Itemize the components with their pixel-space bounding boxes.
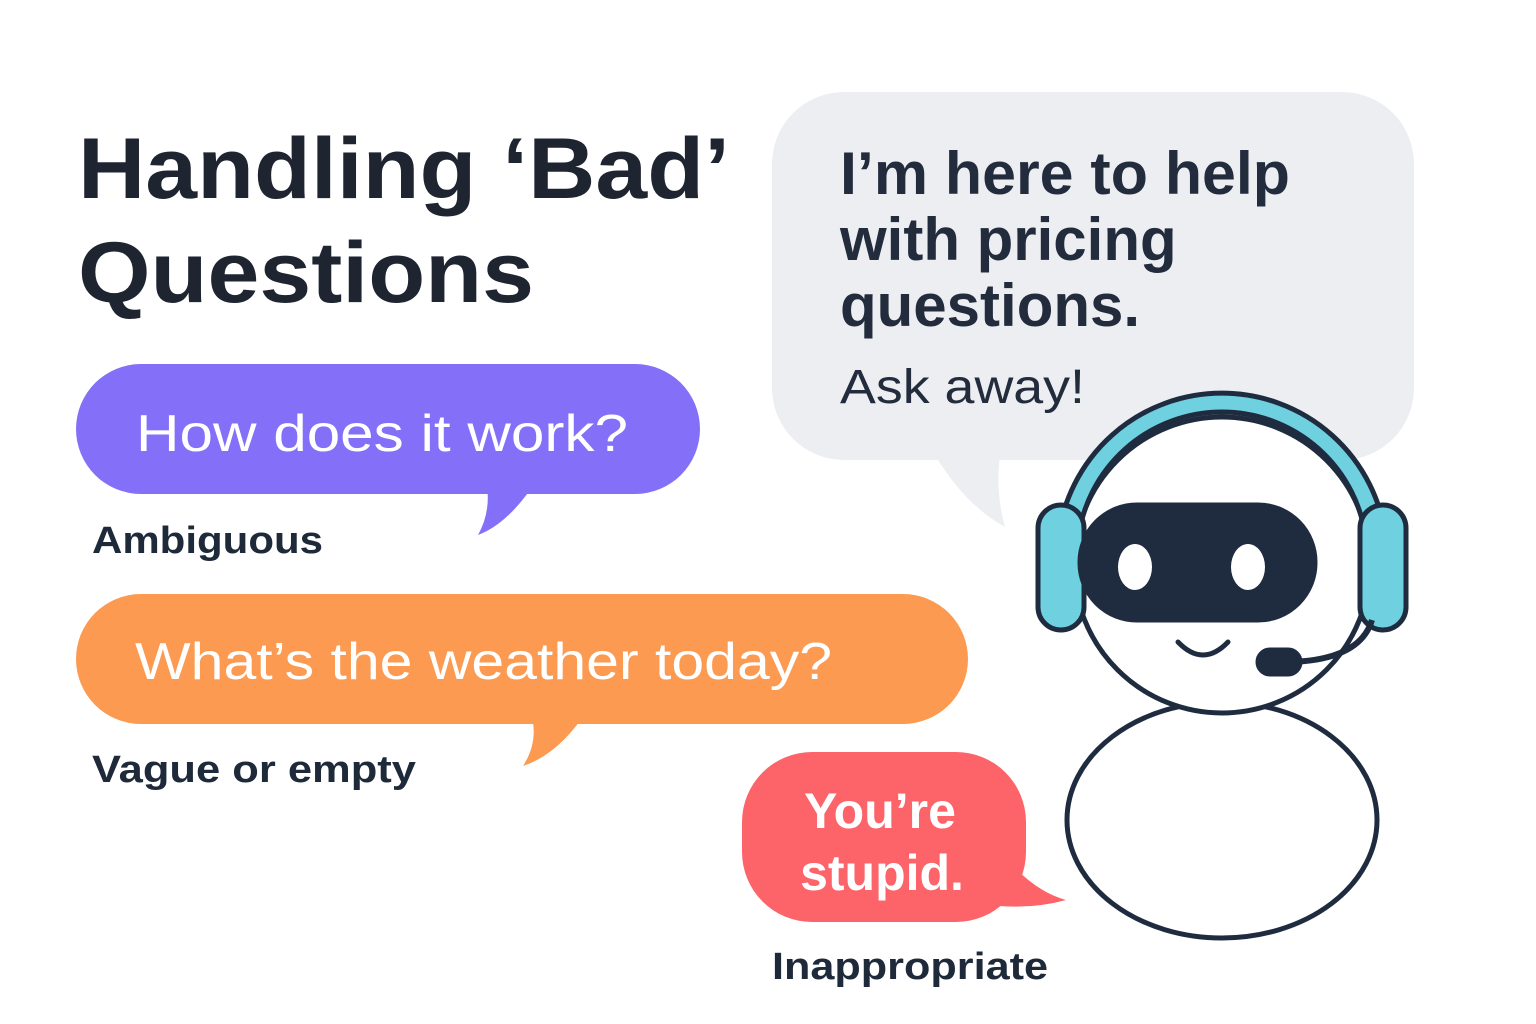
label: Ambiguous: Ambiguous bbox=[92, 520, 323, 562]
title: Questions bbox=[78, 225, 534, 321]
icon: robot support agent bbox=[1038, 393, 1406, 938]
bubble: inappropriate: stupid. bbox=[800, 845, 964, 901]
title bbox=[78, 121, 730, 321]
label: Vague or empty: Vague or empty bbox=[92, 749, 416, 791]
bubble: bot response: questions. bbox=[840, 272, 1140, 339]
bubble: off-topic question: What’s the weather today? bbox=[135, 633, 832, 691]
bubble: inappropriate bbox=[742, 752, 1066, 922]
bubble: ambiguous question: How does it work? bbox=[136, 405, 628, 463]
label: Inappropriate: Inappropriate bbox=[772, 946, 1048, 988]
bubble: bot response bbox=[772, 92, 1414, 527]
bubble: bot response: I’m here to help bbox=[840, 140, 1290, 207]
title: Handling ‘Bad’ bbox=[78, 121, 730, 217]
bubble: bot response: Ask away! bbox=[840, 361, 1085, 414]
bubble: inappropriate: You’re bbox=[804, 783, 956, 839]
bubble: bot response: with pricing bbox=[839, 206, 1177, 273]
bubble: ambiguous question bbox=[76, 364, 700, 535]
bubble: off-topic question bbox=[76, 594, 968, 766]
